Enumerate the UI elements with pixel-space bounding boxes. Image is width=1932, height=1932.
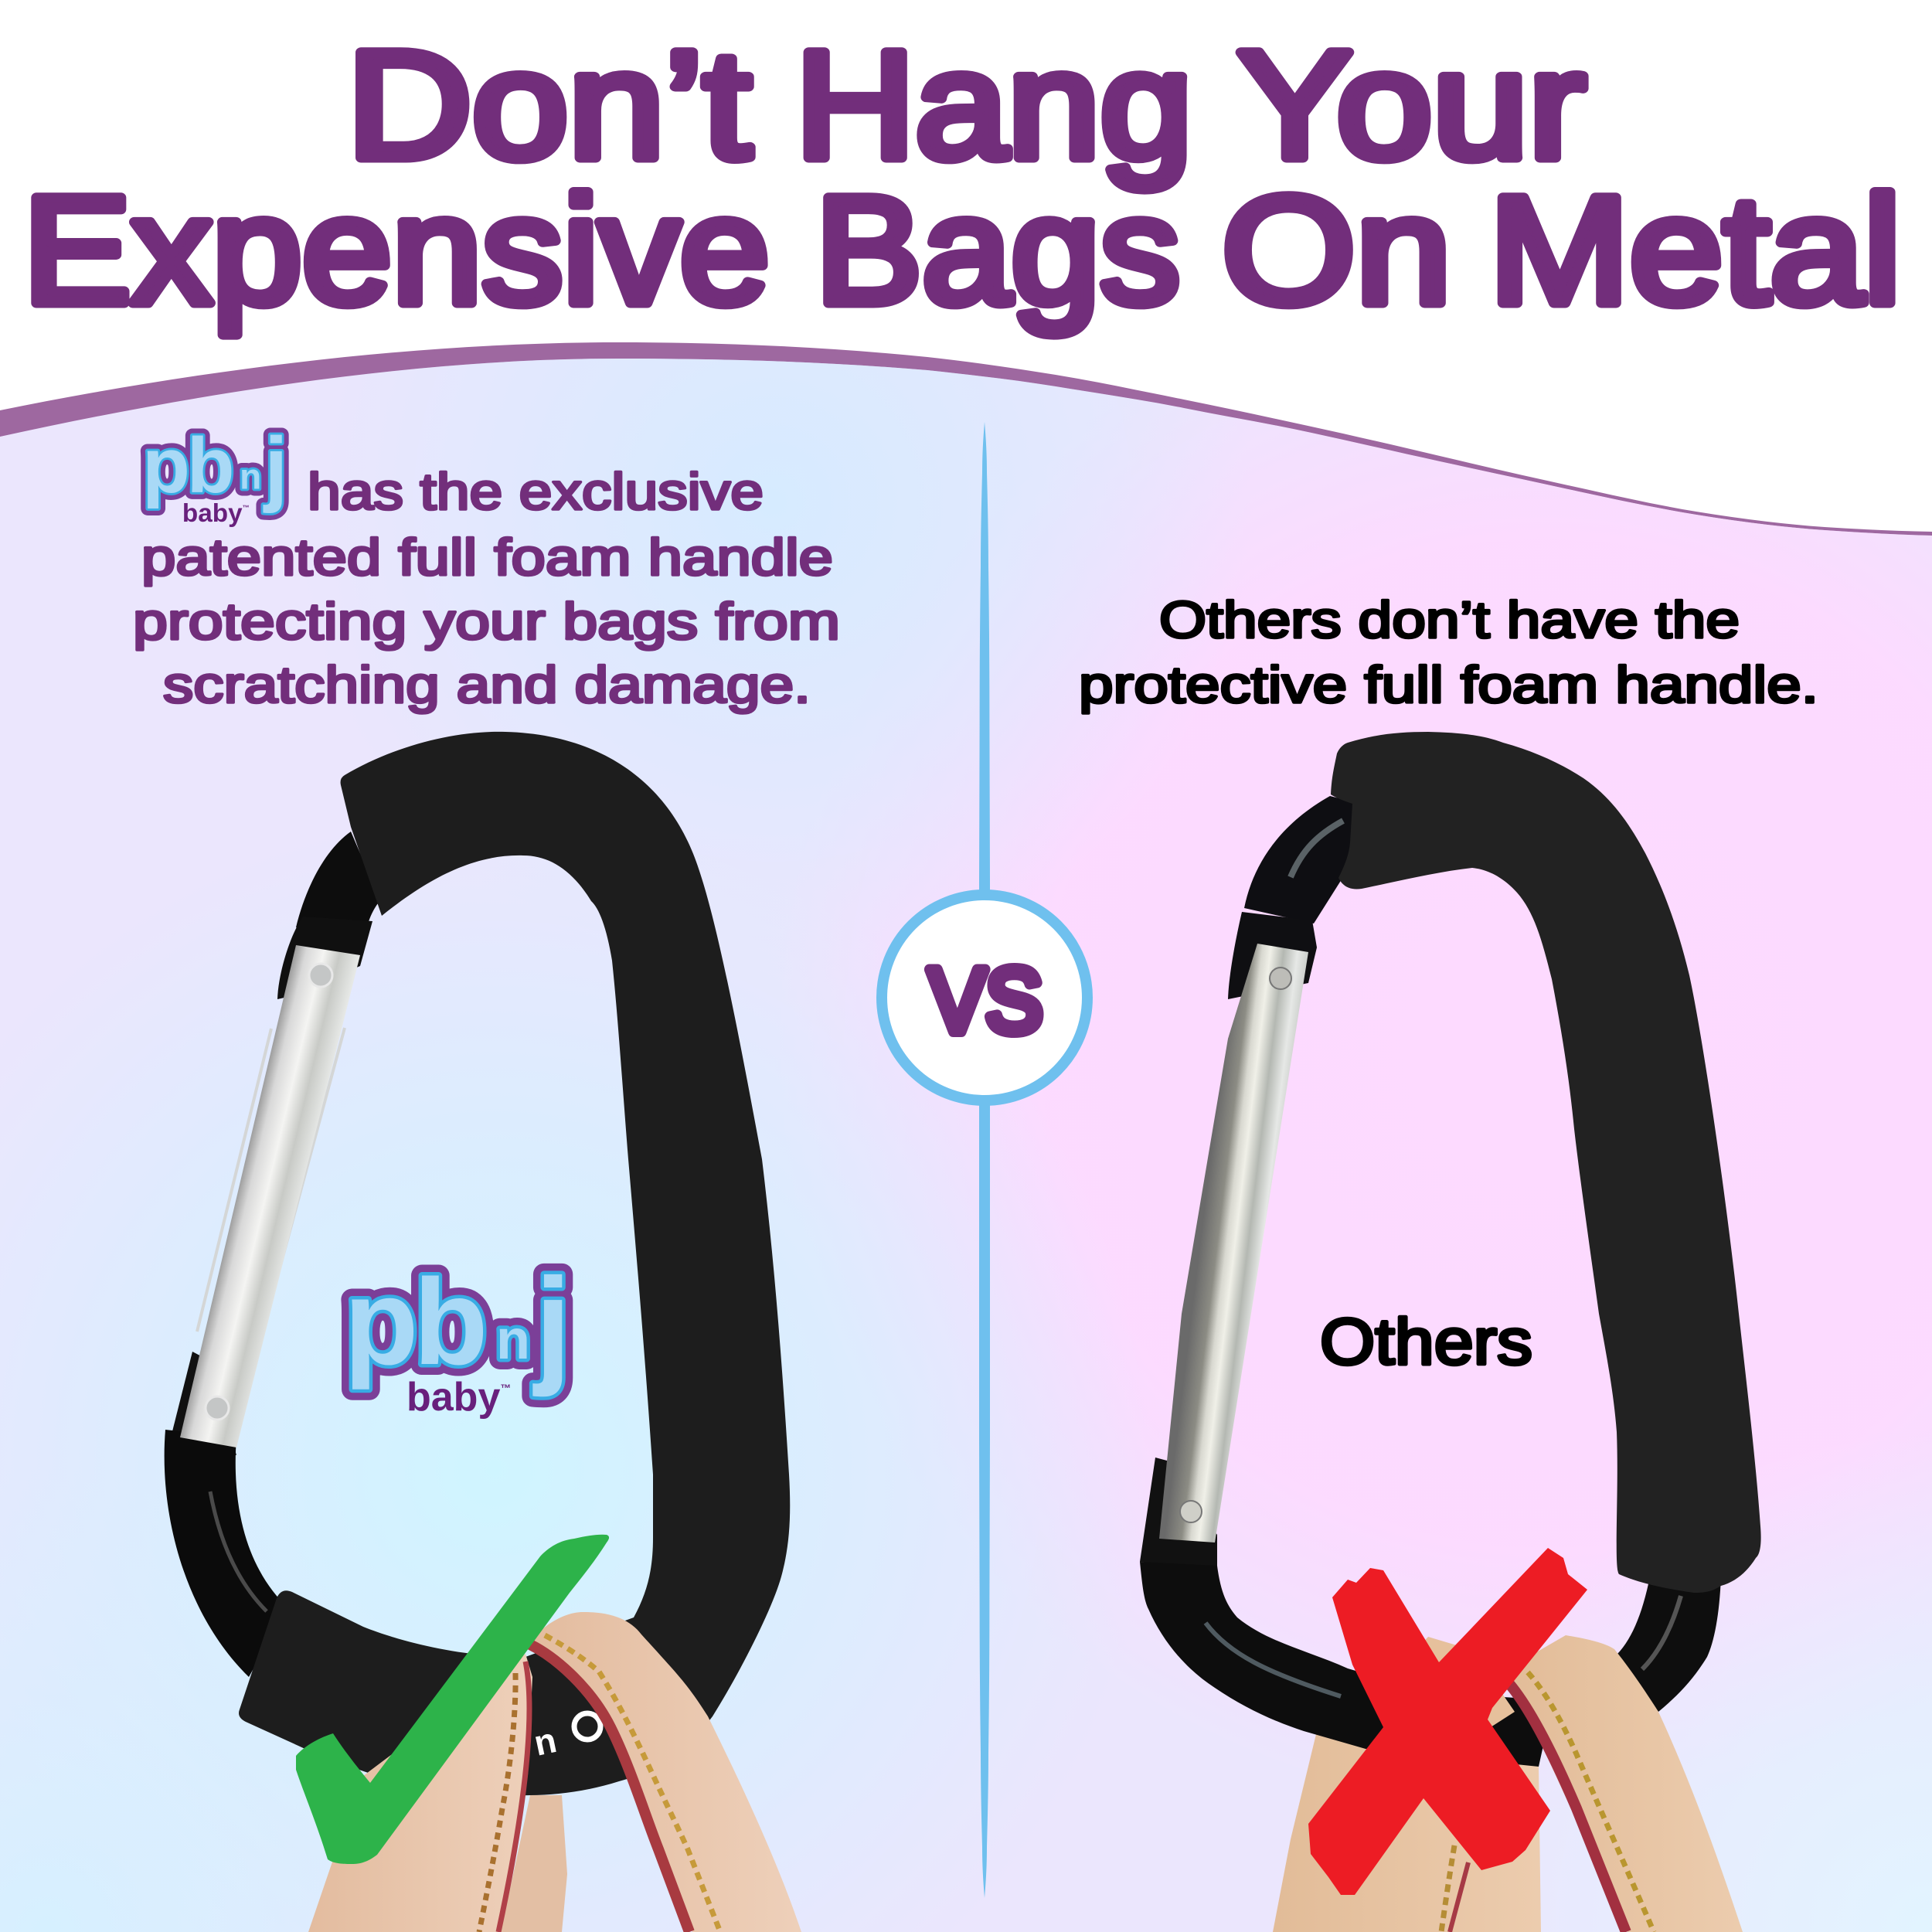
small pbnj baby logo: b	[187, 422, 234, 509]
front strap stitching	[1528, 1672, 1654, 1932]
title: On	[1222, 165, 1451, 335]
front strap stitching	[545, 1635, 720, 1932]
upper metal tube	[1244, 796, 1360, 923]
title: Don’t	[347, 19, 751, 190]
small pbnj baby logo: baby	[182, 499, 243, 528]
back strap stitching	[479, 1673, 515, 1932]
right metal tube	[1614, 1577, 1721, 1712]
back strap red edge	[498, 1662, 529, 1932]
title: Expensive	[23, 165, 770, 335]
large pbnj baby logo: b	[413, 1254, 488, 1390]
large pbnj baby logo: baby	[406, 1375, 500, 1420]
small pbnj baby logo: j	[263, 420, 287, 514]
small pbnj baby logo: j	[263, 420, 287, 514]
small pbnj baby logo: b	[187, 422, 234, 509]
green check mark	[296, 1535, 609, 1864]
right carabiner with partial foam	[1140, 732, 1761, 1767]
large pbnj baby logo: j	[532, 1251, 571, 1398]
wave purple band	[0, 342, 1932, 587]
small pbnj baby logo: n	[240, 456, 261, 496]
title: Bags	[815, 165, 1180, 335]
right description text: Others don’t have the	[1159, 591, 1740, 649]
wire lock rails	[197, 1028, 345, 1337]
lower tube highlight	[1206, 1623, 1341, 1696]
back strap red edge	[1450, 1862, 1468, 1932]
front strap red edge	[1503, 1677, 1626, 1932]
upper gate collar	[277, 917, 372, 999]
left description text	[133, 463, 840, 714]
foam brand print	[530, 1713, 600, 1764]
back strap	[308, 1654, 532, 1932]
small pbnj baby logo: p	[142, 422, 190, 509]
foam handle	[239, 732, 790, 1795]
left description text: has the exclusive	[308, 463, 764, 521]
right description text	[1079, 591, 1818, 714]
upper gate collar	[1228, 912, 1317, 999]
right tube highlight	[1642, 1596, 1681, 1669]
gate rivets	[1180, 968, 1291, 1522]
large pbnj baby logo	[344, 1251, 571, 1420]
large pbnj baby logo: n	[496, 1309, 530, 1371]
large pbnj baby logo: ™	[500, 1382, 511, 1394]
foam handle	[1331, 732, 1761, 1593]
large pbnj baby logo: p	[344, 1254, 419, 1390]
left description text: protecting your bags from	[133, 593, 840, 651]
front strap red edge	[530, 1645, 689, 1932]
large pbnj baby logo: p	[344, 1254, 419, 1390]
divider line with VS badge	[882, 422, 1087, 1898]
right description text: protective full foam handle.	[1079, 656, 1818, 714]
large pbnj baby logo: n	[496, 1309, 530, 1371]
strap loop top	[1391, 1637, 1515, 1747]
left description text: patented full foam handle	[141, 529, 833, 587]
small pbnj baby logo: n	[240, 456, 261, 496]
back strap stitching	[1441, 1845, 1454, 1932]
small pbnj baby logo	[142, 420, 287, 528]
lower gate collar	[1140, 1458, 1217, 1569]
lower metal tube	[165, 1430, 287, 1677]
right bag back strap	[1273, 1731, 1541, 1932]
right bag front straps	[1391, 1635, 1743, 1932]
title: Hang	[795, 19, 1192, 190]
title	[23, 19, 1901, 335]
tube highlight	[210, 1492, 267, 1611]
upper metal tube	[296, 832, 380, 943]
title: Your	[1237, 19, 1586, 190]
small pbnj baby logo: p	[142, 422, 190, 509]
left carabiner with full foam handle	[165, 732, 790, 1795]
small pbnj baby logo: ™	[243, 504, 250, 512]
gap strap	[501, 1795, 567, 1932]
silver gate	[180, 945, 360, 1447]
upper tube highlight	[1291, 821, 1343, 877]
red x mark	[1308, 1548, 1587, 1895]
lower gate collar	[170, 1352, 236, 1455]
silver gate	[1159, 944, 1308, 1543]
foam brand print: n	[530, 1719, 560, 1764]
lower metal tube	[1140, 1562, 1553, 1767]
others label: Others	[1320, 1305, 1532, 1378]
front strap	[1507, 1635, 1743, 1932]
gate rivets	[206, 964, 332, 1420]
title: Metal	[1489, 165, 1901, 335]
left description text: scratching and damage.	[163, 656, 811, 714]
divider line with VS badge: VS	[929, 950, 1043, 1051]
large pbnj baby logo: b	[413, 1254, 488, 1390]
left bag straps	[308, 1612, 801, 1932]
large pbnj baby logo: j	[532, 1251, 571, 1398]
front strap	[530, 1612, 801, 1932]
